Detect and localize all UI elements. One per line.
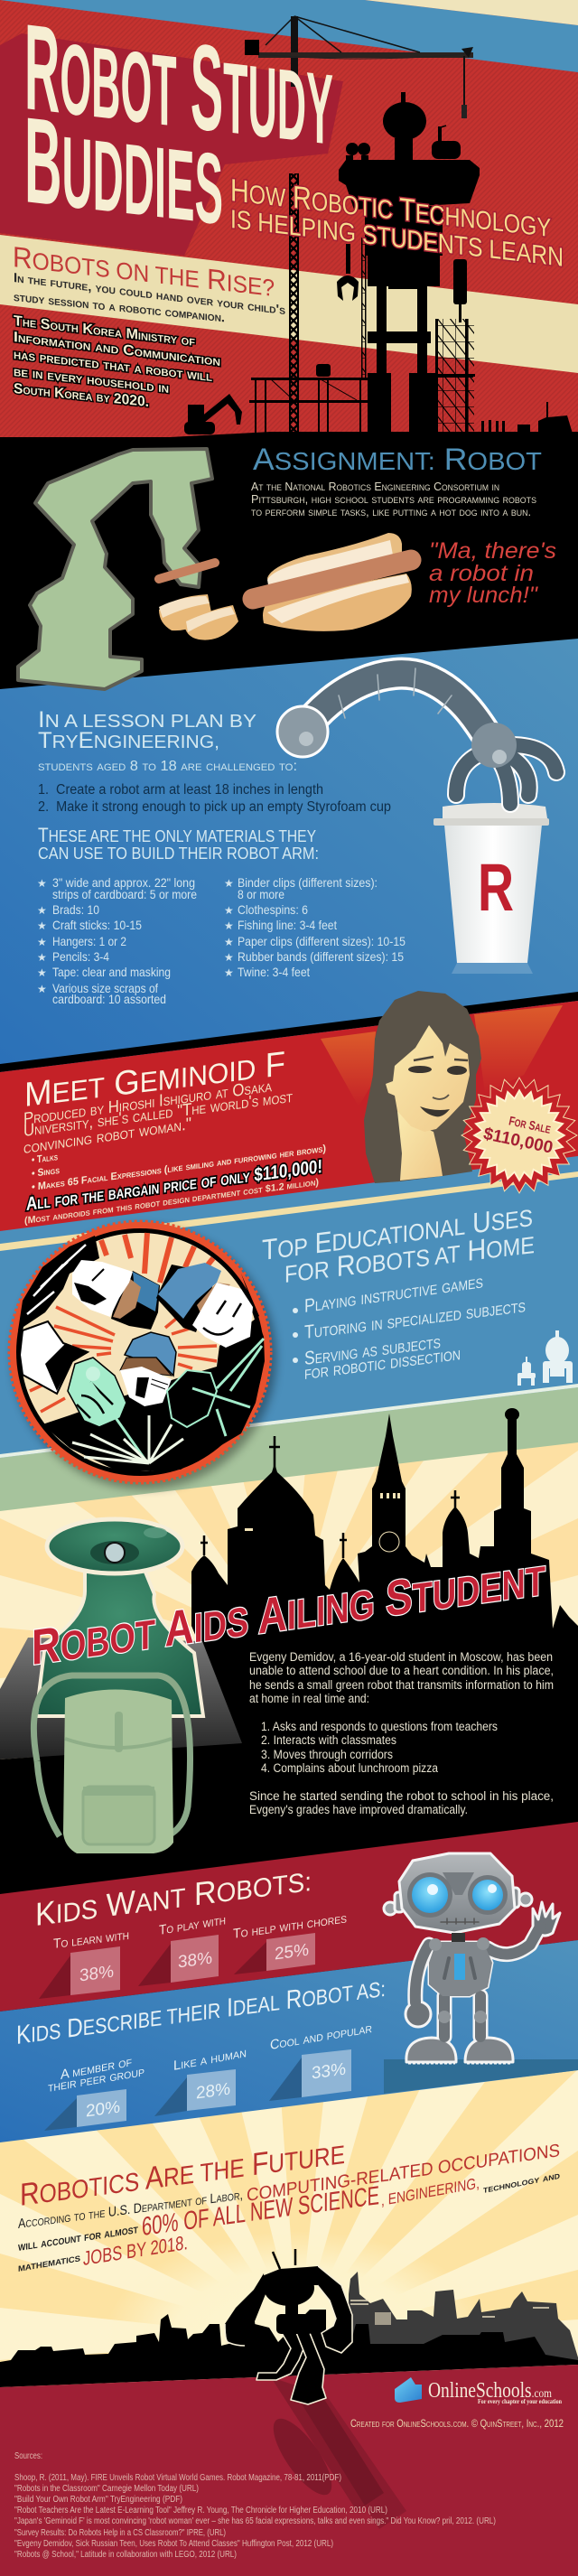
text: south korea prediction: be in every household in	[14, 363, 169, 397]
text: south korea prediction	[14, 313, 220, 410]
chart: bars describe: their peer group	[48, 2064, 144, 2095]
list: geminoid abilities: • Makes 65 Facial Expressions (like smiling and furrowing her brows)	[32, 1143, 326, 1193]
callout: bargain price: All for the bargain price of only $110,000!	[26, 1156, 322, 1215]
icon: waving gray robot	[384, 1853, 560, 2063]
list: materials column one: ★	[37, 877, 47, 890]
heading: top educational uses	[262, 1199, 535, 1289]
illustration: gray city skyline	[349, 2272, 578, 2362]
list: geminoid abilities: • Talks	[32, 1152, 59, 1166]
text: sources: "Build Your Own Robot Arm" TryEngineering (PDF)	[14, 2495, 182, 2505]
icon: tiny white robots	[517, 1330, 573, 1386]
heading: title: ROBOT STUDY	[24, 0, 333, 171]
list: materials column two: ★	[224, 951, 234, 964]
text: computing occupations statistic: JOBS BY 2018.	[83, 2231, 188, 2270]
list: materials column two: Clothespins: 6	[238, 902, 308, 917]
heading: meet geminoid f: MEET GEMINOID F	[24, 1044, 285, 1115]
text: computing occupations statistic: mathematics	[18, 2250, 80, 2274]
panel: robot aids ailing student	[0, 1408, 578, 1894]
text: computing occupations statistic: According to the U.S. Department of Labor,	[18, 2188, 243, 2232]
badge: for sale price	[461, 1058, 578, 1199]
list: materials column one: Various size scraps of	[52, 981, 158, 995]
list: geminoid abilities: • Sings	[32, 1165, 61, 1180]
badge: for sale price: FOR SALE	[508, 1113, 553, 1136]
heading: robots on the rise: ROBOTS ON THE RISE?	[13, 240, 275, 303]
icon: onlineschools logo	[395, 2377, 422, 2403]
panel: lesson plan	[0, 623, 578, 1084]
heading: title: BUDDIES	[24, 90, 223, 250]
text: computing occupations statistic: COMPUTING-RELATED OCCUPATIONS	[247, 2141, 560, 2206]
chart: bars want: 38%	[178, 1949, 212, 1972]
list: materials column one: 3" wide and approx. 22" long	[52, 875, 195, 890]
icon: robot silhouette under construction	[249, 92, 573, 438]
heading: robot aids ailing student: ROBOT AIDS AILING STUDENT	[32, 1549, 545, 1675]
list: materials column two: 8 or more	[238, 887, 284, 901]
quote: robot in my lunch	[429, 538, 556, 608]
icon: giant robot silhouette	[225, 2249, 352, 2404]
text: geminoid description: Produced by Hiroshi Ishiguro at Osaka	[23, 1077, 272, 1129]
text: intro: study session to a robotic companion.	[14, 290, 225, 325]
list: materials column one: strips of cardboard: 5 or more	[52, 887, 197, 901]
chart: bars describe: 28%	[196, 2080, 230, 2103]
chart: bars want: 25%	[275, 1941, 309, 1964]
badge: for sale price: $110,000	[481, 1125, 555, 1158]
list: educational uses: Playing instructive games	[304, 1271, 483, 1317]
text: sources	[14, 2451, 496, 2560]
icon: robotic arm gripper	[277, 668, 556, 804]
list: materials column one: ★	[37, 919, 47, 932]
logo: onlineschools wordmark: For every chapter of your education	[478, 2398, 562, 2405]
illustration: moscow skyline	[0, 1408, 578, 1894]
text: sources: "Robots in the Classroom" Carnegie Mellon Today (URL)	[14, 2484, 199, 2494]
text: south korea prediction: The South Korea Ministry of	[14, 313, 195, 350]
list: materials column two: ★	[224, 936, 234, 948]
icon: coffee cup with R	[434, 803, 549, 974]
text: computing occupations statistic	[18, 2141, 560, 2274]
text: south korea prediction: South Korea by 2020.	[14, 380, 149, 410]
list: materials column two: ★	[224, 966, 234, 979]
heading: robotics are the future: ROBOTICS ARE THE FUTURE	[20, 2135, 345, 2213]
note: android cost: (Most androids from this robot design department cost $1.2 million)	[24, 1177, 319, 1227]
heading: lesson plan: IN A LESSON PLAN BY	[38, 707, 256, 733]
list: educational uses: Serving as subjects	[304, 1331, 441, 1369]
list: materials column one: cardboard: 10 assorted	[52, 992, 166, 1006]
text: sources: "Evgeny Demidov, Sick Russian Teen, Uses Robot To Attend Classes" Huffington Post, 2012 (URL)	[14, 2539, 333, 2549]
list: robot tasks: 4. Complains about lunchroom pizza	[261, 1761, 438, 1775]
list: challenge steps	[38, 782, 391, 815]
text: improved grades: Since he started sending the robot to school in his place,	[249, 1789, 554, 1803]
panel: top educational uses text	[262, 1199, 573, 1386]
list: materials column two: ★	[224, 904, 234, 917]
text: sources: Shoop, R. (2011, May). FIRE Unveils Robot Virtual World Games. Robot Magazine, 78-81, 2011(PDF)	[14, 2473, 341, 2483]
text: computing occupations statistic: technology and	[483, 2169, 560, 2196]
icon: lattice tower	[289, 173, 299, 444]
list: materials column one: Tape: clear and masking	[52, 965, 171, 979]
list: materials column one: Pencils: 3-4	[52, 949, 109, 964]
chart: bars describe: Like a human	[173, 2045, 247, 2074]
heading: top educational uses: TOP EDUCATIONAL USES	[262, 1199, 533, 1266]
text: geminoid description: University, she's called "The world's most	[23, 1087, 293, 1141]
text: improved grades	[249, 1789, 554, 1816]
list: materials column one: ★	[37, 904, 47, 917]
panel: assignment robot	[0, 432, 578, 689]
panel: educational uses background	[0, 1138, 578, 1463]
icon: sausage in gripper	[159, 563, 215, 579]
chart: bars describe: Cool and popular	[270, 2021, 372, 2053]
icon: cut hot dog bun	[159, 594, 238, 640]
list: robot tasks: 1. Asks and responds to questions from teachers	[261, 1720, 498, 1733]
list: robot tasks	[261, 1720, 498, 1775]
list: materials column two: Paper clips (different sizes): 10-15	[238, 934, 406, 948]
text: geminoid description	[23, 1077, 293, 1158]
icon: green robot arm	[18, 449, 212, 689]
list: materials column one: Craft sticks: 10-15	[52, 918, 142, 932]
icon: geminoid portrait	[364, 991, 481, 1183]
list: materials column two: Fishing line: 3-4 feet	[238, 918, 337, 932]
panel: future sunburst background	[0, 2059, 578, 2448]
panel: footer	[0, 2365, 578, 2576]
heading: lesson plan	[38, 707, 256, 753]
panel: meet geminoid f	[0, 991, 578, 1231]
heading: lesson plan: TRYENGINEERING,	[38, 728, 219, 753]
chart: bars describe: 33%	[312, 2060, 346, 2083]
chart: bars want: To play with	[159, 1912, 226, 1938]
icon: construction crane	[245, 16, 473, 118]
quote: robot in my lunch: a robot in	[429, 561, 534, 586]
list: materials column two: ★	[224, 919, 234, 932]
list: materials column two: Binder clips (different sizes):	[238, 875, 378, 890]
list: materials column two: Twine: 3-4 feet	[238, 965, 310, 979]
quote: robot in my lunch: "Ma, there's	[429, 538, 556, 564]
heading: materials: THESE ARE THE ONLY MATERIALS THEY	[38, 824, 316, 846]
text: sources: "Robots @ School," Latitude in collaboration with LEGO, 2012 (URL)	[14, 2550, 237, 2560]
text: evgeny demidov story: Evgeny Demidov, a 16-year-old student in Moscow, has been	[249, 1650, 553, 1664]
text: national robotics consortium: Pittsburgh, high school students are programming robots	[251, 492, 536, 506]
heading: assignment robot: ASSIGNMENT: ROBOT	[253, 443, 542, 477]
list: materials column one: Hangers: 1 or 2	[52, 934, 126, 948]
panel: green strip	[0, 1384, 578, 1511]
text: national robotics consortium: At the National Robotics Engineering Consortium in	[251, 480, 499, 493]
text: sources: "Survey Results: Do Robots Help in a CS Classroom?" IPRE, (URL)	[14, 2528, 226, 2538]
list: materials column two	[224, 875, 406, 979]
text: improved grades: Evgeny's grades have improved dramatically.	[249, 1803, 468, 1816]
chart: bars describe: A member of	[61, 2054, 132, 2083]
list: educational uses: for robotic dissection	[304, 1343, 461, 1384]
text: intro: In the future, you could hand over your child's	[14, 271, 285, 318]
chart: bars describe	[44, 2021, 372, 2131]
list: materials column two: Rubber bands (different sizes): 15	[238, 949, 404, 964]
list: materials column one: ★	[37, 983, 47, 995]
panel: moscow sunburst background	[0, 1409, 578, 1770]
icon: surgeons medallion	[10, 1222, 276, 1489]
heading: materials	[38, 824, 319, 863]
text: geminoid description: convincing robot woman."	[23, 1115, 191, 1158]
list: challenge steps: 1. Create a robot arm at least 18 inches in length	[38, 782, 323, 798]
list: challenge steps: 2. Make it strong enough to pick up an empty Styrofoam cup	[38, 799, 391, 815]
panel: kids describe ideal robot	[0, 1940, 578, 2142]
icon: hot dog	[253, 533, 412, 631]
icon: coffee cup with R: R	[478, 850, 514, 925]
icon: green robot with backpack	[33, 1519, 203, 1853]
text: evgeny demidov story: he sends a small green robot that transmits information to him	[249, 1678, 554, 1692]
text: national robotics consortium: to perform simple tasks, like putting a hot dog into a bun.	[251, 505, 531, 518]
chart: bars want: To help with chores	[233, 1910, 347, 1942]
list: materials column one: ★	[37, 966, 47, 979]
logo: onlineschools wordmark: OnlineSchools.com	[428, 2379, 552, 2403]
list: materials column two: ★	[224, 877, 234, 890]
text: computing occupations statistic: 60% OF ALL NEW SCIENCE	[142, 2181, 379, 2242]
chart: bars want	[39, 1910, 347, 1999]
text: sources: "Robot Teachers Are the Latest E-Learning Tool" Jeffrey R. Young, The Chronicle for Higher Education, 2010 (URL)	[14, 2506, 387, 2515]
chart: bars want: 38%	[79, 1963, 114, 1985]
heading: materials: CAN USE TO BUILD THEIR ROBOT ARM:	[38, 845, 319, 863]
panel: robotics are the future	[0, 2135, 578, 2387]
heading: kids describe: KIDS DESCRIBE THEIR IDEAL ROBOT AS:	[16, 1974, 386, 2050]
list: robot tasks: 2. Interacts with classmates	[261, 1733, 396, 1747]
text: computing occupations statistic: will account for almost	[18, 2221, 138, 2254]
text: students challenged: students aged 8 to 18 are challenged to:	[38, 759, 297, 774]
list: educational uses: Tutoring in specialized subjects	[304, 1295, 526, 1343]
panel: kids want robots	[0, 1822, 578, 2011]
decoration: robot shadow	[264, 2377, 406, 2529]
list: materials column one: ★	[37, 951, 47, 964]
text: evgeny demidov story	[249, 1650, 554, 1705]
decoration: gray cone behind robot	[0, 1638, 242, 1759]
list: educational uses	[293, 1271, 526, 1384]
text: evgeny demidov story: at home in real time and:	[249, 1692, 369, 1705]
panel: hero header	[0, 0, 578, 444]
illustration: black city skyline	[0, 2310, 578, 2387]
text: sources: Sources:	[14, 2451, 42, 2461]
text: national robotics consortium	[251, 480, 536, 518]
heading: top educational uses: FOR ROBOTS AT HOME	[284, 1227, 535, 1289]
text: computing occupations statistic: , ENGINEERING,	[381, 2174, 480, 2209]
chart: bars describe: 20%	[86, 2098, 120, 2121]
heading: title	[24, 0, 333, 250]
icon: excavator	[184, 394, 242, 434]
list: materials column one	[37, 875, 197, 1006]
list: robot tasks: 3. Moves through corridors	[261, 1748, 393, 1761]
list: materials column one: ★	[37, 936, 47, 948]
heading: kids want robots: KIDS WANT ROBOTS:	[35, 1861, 312, 1933]
quote: robot in my lunch: my lunch!"	[429, 583, 538, 608]
subtitle: HOW ROBOTIC TECHNOLOGY	[230, 173, 551, 244]
text: south korea prediction: has predicted that a robot will	[14, 346, 212, 385]
text: evgeny demidov story: unable to attend school due to a heart condition. In his place,	[249, 1664, 554, 1677]
text: south korea prediction: Information and Communication	[14, 329, 220, 369]
chart: bars want: To learn with	[53, 1927, 129, 1952]
list: materials column one: Brads: 10	[52, 902, 99, 917]
